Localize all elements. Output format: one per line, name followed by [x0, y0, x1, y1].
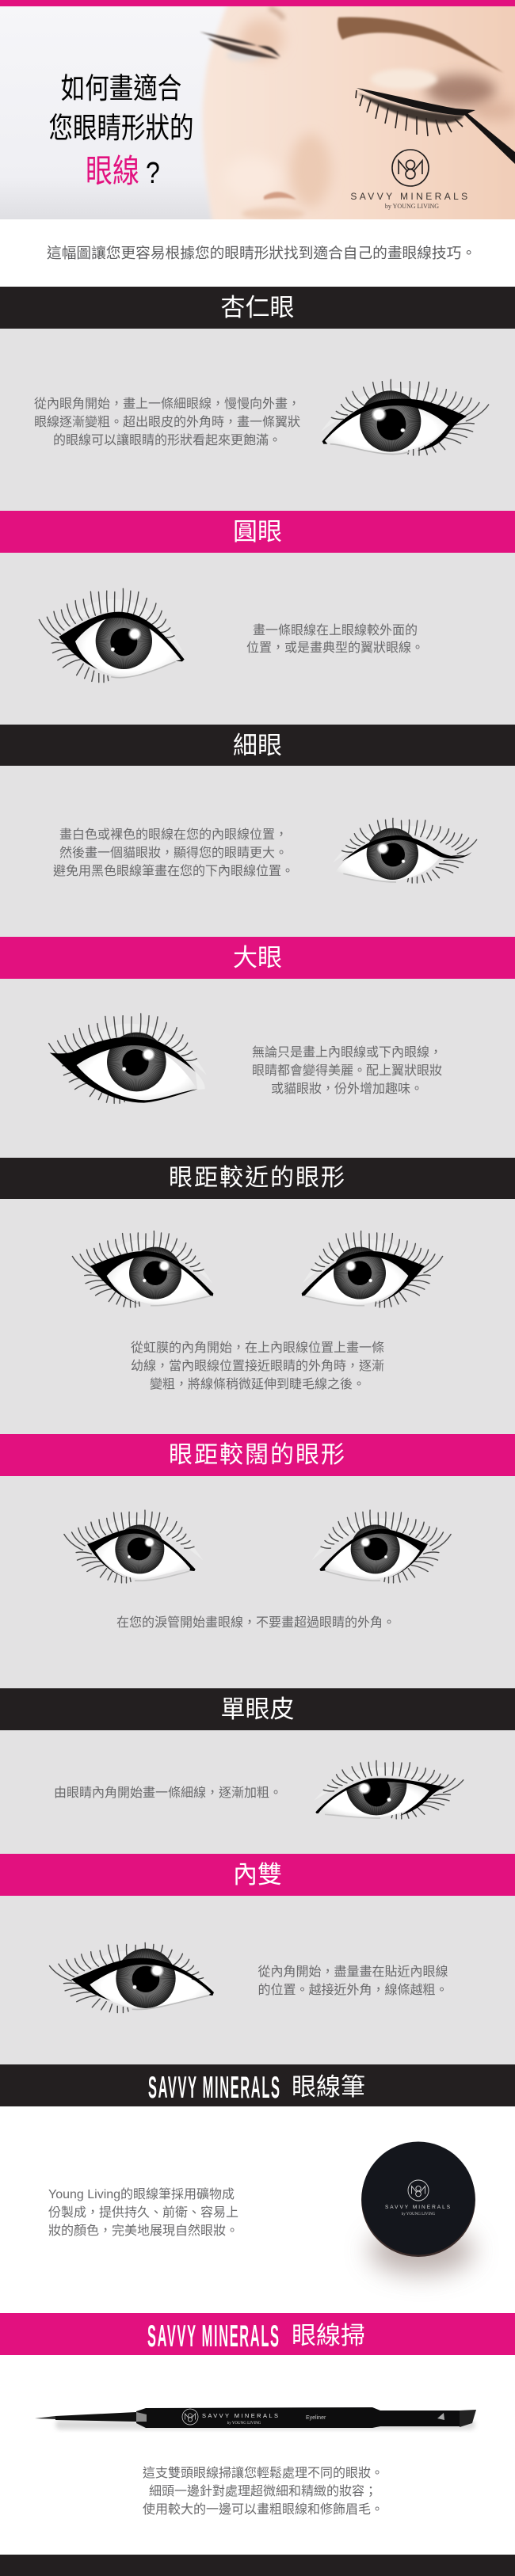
text: almond tip: 的眼線可以讓眼睛的形狀看起來更飽滿。 — [53, 434, 281, 447]
intro text: 這幅圖讓您更容易根據您的眼睛形狀找到適合自己的畫眼線技巧。 — [47, 245, 476, 261]
title: 您眼睛形狀的 — [49, 112, 193, 144]
text: big eyes tip: 眼睛都會變得美麗。配上翼狀眼妝 — [252, 1064, 442, 1077]
title: 如何畫適合 — [61, 73, 181, 105]
text: eyeliner description — [48, 2187, 238, 2238]
text: hooded tip: 從內角開始，盡量畫在貼近內眼線 — [258, 1965, 448, 1978]
heading: narrow eyes: 細眼 — [233, 732, 282, 759]
text: round tip — [246, 623, 424, 655]
icon: eyeliner jar: by YOUNG LIVING — [402, 2213, 436, 2216]
text: narrow tip: 畫白色或裸色的眼線在您的內眼線位置， — [59, 828, 288, 841]
text: brush description: 細頭一邊針對處理超微細和精緻的妝容； — [149, 2485, 377, 2498]
panel: hooded eyes — [0, 1896, 515, 2064]
text: close-set tip: 從虹膜的內角開始，在上內眼線位置上畫一條 — [131, 1341, 384, 1354]
text: almond tip: 眼線逐漸變粗。超出眼皮的外角時，畫一條翼狀 — [34, 415, 300, 429]
title — [49, 73, 193, 190]
text: close-set tip — [131, 1341, 384, 1391]
heading: almond eyes: 杏仁眼 — [220, 294, 295, 322]
icon: monolid eye — [314, 1755, 464, 1819]
text: brush description: 使用較大的一邊可以畫粗眼線和修飾眉毛。 — [143, 2502, 383, 2517]
text: almond tip — [34, 397, 300, 447]
heading: wide-set eyes — [0, 1434, 515, 1476]
panel: wide-set eyes — [0, 1476, 515, 1688]
text: narrow tip — [53, 828, 294, 877]
text: big eyes tip: 或貓眼妝，份外增加趣味。 — [271, 1082, 423, 1096]
heading: Savvy Minerals eyeliner brush — [0, 2313, 515, 2355]
panel: almond eyes — [0, 329, 515, 511]
title: ? — [146, 155, 160, 190]
heading: monolid — [0, 1688, 515, 1730]
panel: eyeliner brush — [0, 2355, 515, 2555]
text: close-set tip: 幼線，當內眼線位置接近眼睛的外角時，逐漸 — [131, 1359, 384, 1373]
title: 眼線 — [86, 154, 139, 190]
panel: eyeliner product — [0, 2106, 515, 2313]
heading: close-set eyes — [0, 1158, 515, 1199]
text: brush description: 這支雙頭眼線掃讓您輕鬆處理不同的眼妝。 — [143, 2466, 383, 2480]
heading: monolid: 單眼皮 — [220, 1695, 295, 1723]
illustration: face applying eyeliner — [0, 6, 515, 219]
panel: close-set eyes — [0, 1199, 515, 1434]
icon: eyeliner brush: Eyeliner — [306, 2415, 326, 2421]
icon: wide-set right eye — [312, 1510, 451, 1583]
panel: hero photo with title — [0, 6, 515, 219]
heading: round eyes: 圓眼 — [233, 518, 282, 546]
text: narrow tip: 避免用黑色眼線筆畫在您的下內眼線位置。 — [53, 865, 294, 877]
icon: eyeliner brush — [35, 2407, 476, 2430]
illustration: face applying eyeliner: SAVVY MINERALS — [350, 191, 471, 202]
text: eyeliner description: Young Living的眼線筆採用礦物成 — [48, 2187, 235, 2201]
panel: round eyes — [0, 553, 515, 725]
heading: close-set eyes: 眼距較近的眼形 — [169, 1165, 346, 1191]
text: almond tip: 從內眼角開始，畫上一條細眼線，慢慢向外畫， — [34, 398, 300, 410]
heading: narrow eyes — [0, 725, 515, 766]
icon: wide-set left eye — [64, 1510, 203, 1583]
heading: Savvy Minerals eyeliner: SAVVY MINERALS — [148, 2071, 281, 2105]
text: big eyes tip — [252, 1045, 442, 1096]
text: eyeliner description: 妝的顏色，完美地展現自然眼妝。 — [48, 2224, 238, 2238]
illustration: face applying eyeliner: by YOUNG LIVING — [385, 203, 439, 210]
icon: round eye — [39, 588, 185, 683]
footer bar — [0, 2555, 515, 2576]
text: round tip: 畫一條眼線在上眼線較外面的 — [253, 624, 418, 637]
heading: almond eyes — [0, 287, 515, 329]
text: narrow tip: 然後畫一個貓眼妝，顯得您的眼睛更大。 — [59, 846, 288, 860]
text: hooded tip — [258, 1965, 448, 1997]
text: brush description — [143, 2466, 383, 2517]
panel: big eyes — [0, 979, 515, 1158]
intro text — [0, 219, 515, 287]
text: wide-set tip: 在您的淚管開始畫眼線，不要畫超過眼睛的外角。 — [116, 1615, 395, 1630]
heading: Savvy Minerals eyeliner brush: SAVVY MINERALS — [147, 2319, 280, 2353]
text: round tip: 位置，或是畫典型的翼狀眼線。 — [246, 641, 424, 655]
text: monolid tip: 由眼睛內角開始畫一條細線，逐漸加粗。 — [54, 1786, 282, 1799]
heading: hooded eyes: 內雙 — [233, 1861, 282, 1889]
text: big eyes tip: 無論只是畫上內眼線或下內眼線， — [252, 1045, 442, 1060]
icon: eyeliner brush: by YOUNG LIVING — [227, 2422, 261, 2426]
icon: narrow eye — [333, 818, 477, 883]
icon: eyeliner jar — [361, 2141, 475, 2274]
icon: hooded eye — [50, 1942, 214, 2013]
icon: eyeliner brush: SAVVY MINERALS — [202, 2412, 280, 2419]
text: close-set tip: 變粗，將線條稍微延伸到睫毛線之後。 — [150, 1378, 365, 1391]
text: hooded tip: 的位置。越接近外角，線條越粗。 — [258, 1983, 448, 1997]
heading: big eyes — [0, 937, 515, 979]
text: eyeliner description: 份製成，提供持久、前衛、容易上 — [48, 2206, 238, 2219]
icon: eyeliner jar: SAVVY MINERALS — [385, 2205, 452, 2210]
top pink stripe — [0, 0, 515, 6]
icon: close-set left eye — [72, 1231, 213, 1307]
heading: Savvy Minerals eyeliner — [0, 2064, 515, 2106]
heading: round eyes — [0, 511, 515, 553]
heading: big eyes: 大眼 — [233, 944, 282, 972]
icon: almond eye — [321, 379, 489, 455]
heading: Savvy Minerals eyeliner: 眼線筆 — [292, 2073, 365, 2101]
panel: narrow eyes — [0, 766, 515, 937]
heading: wide-set eyes: 眼距較闊的眼形 — [169, 1441, 346, 1468]
heading: Savvy Minerals eyeliner brush: 眼線掃 — [292, 2322, 365, 2350]
heading: hooded eyes — [0, 1854, 515, 1896]
panel: monolid — [0, 1730, 515, 1854]
icon: close-set right eye — [302, 1231, 443, 1307]
icon: big eye — [49, 1014, 207, 1103]
